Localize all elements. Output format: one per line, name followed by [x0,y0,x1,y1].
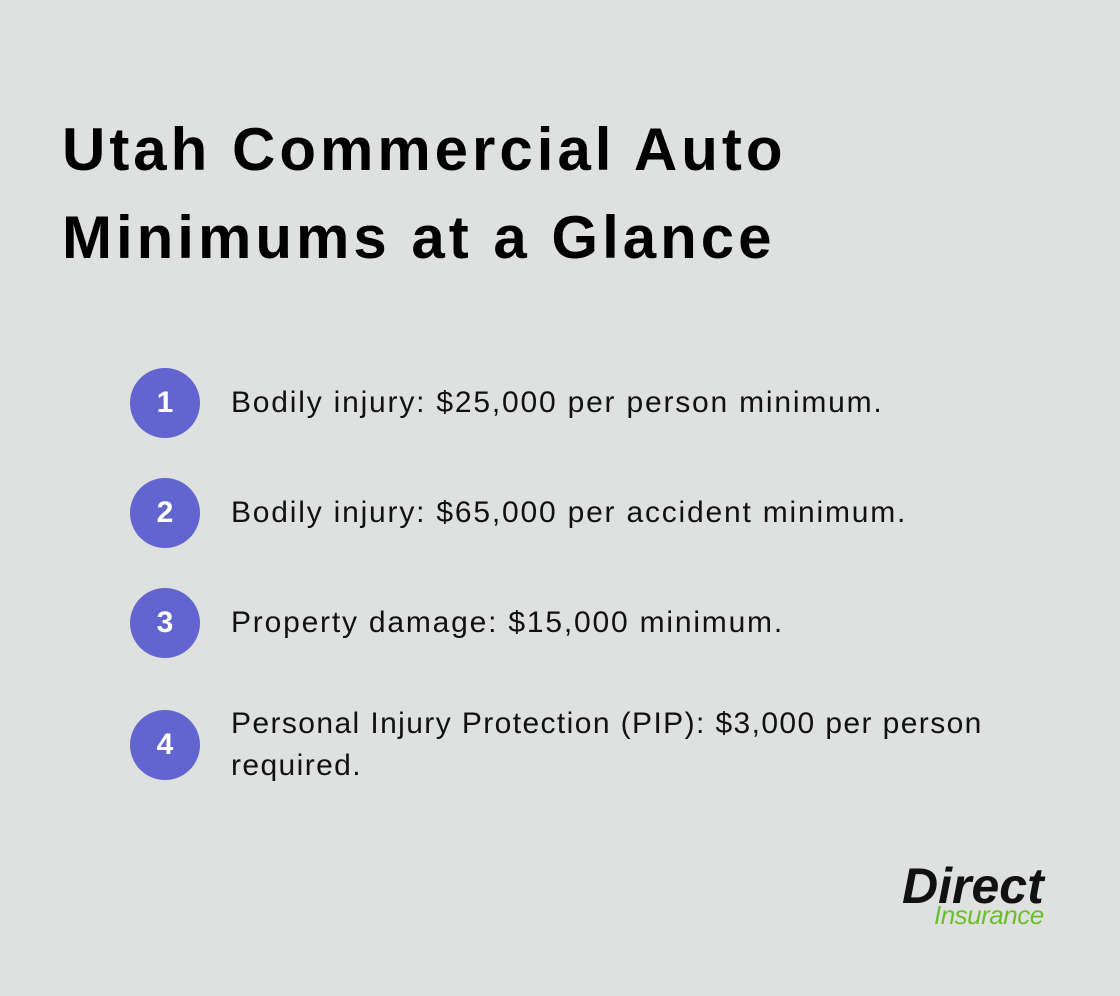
item 2 [130,478,907,548]
item 4: required. [231,749,362,782]
title: Minimums at a Glance [62,204,776,271]
item 3 [130,588,784,658]
item 1 [130,368,884,438]
item 3: 3 [157,606,173,639]
item 2: Bodily injury: $65,000 per accident minimum. [231,496,907,529]
logo: Direct [902,858,1044,914]
logo: Insurance [934,900,1044,930]
item 4 [130,707,983,782]
item 4: Personal Injury Protection (PIP): $3,000 per person [231,707,983,740]
item 1: 1 [157,386,173,419]
item 4: 4 [157,728,173,761]
item 2: 2 [157,496,173,529]
title [62,116,787,271]
title: Utah Commercial Auto [62,116,787,183]
item 1: Bodily injury: $25,000 per person minimum. [231,386,884,419]
item 3: Property damage: $15,000 minimum. [231,606,784,639]
